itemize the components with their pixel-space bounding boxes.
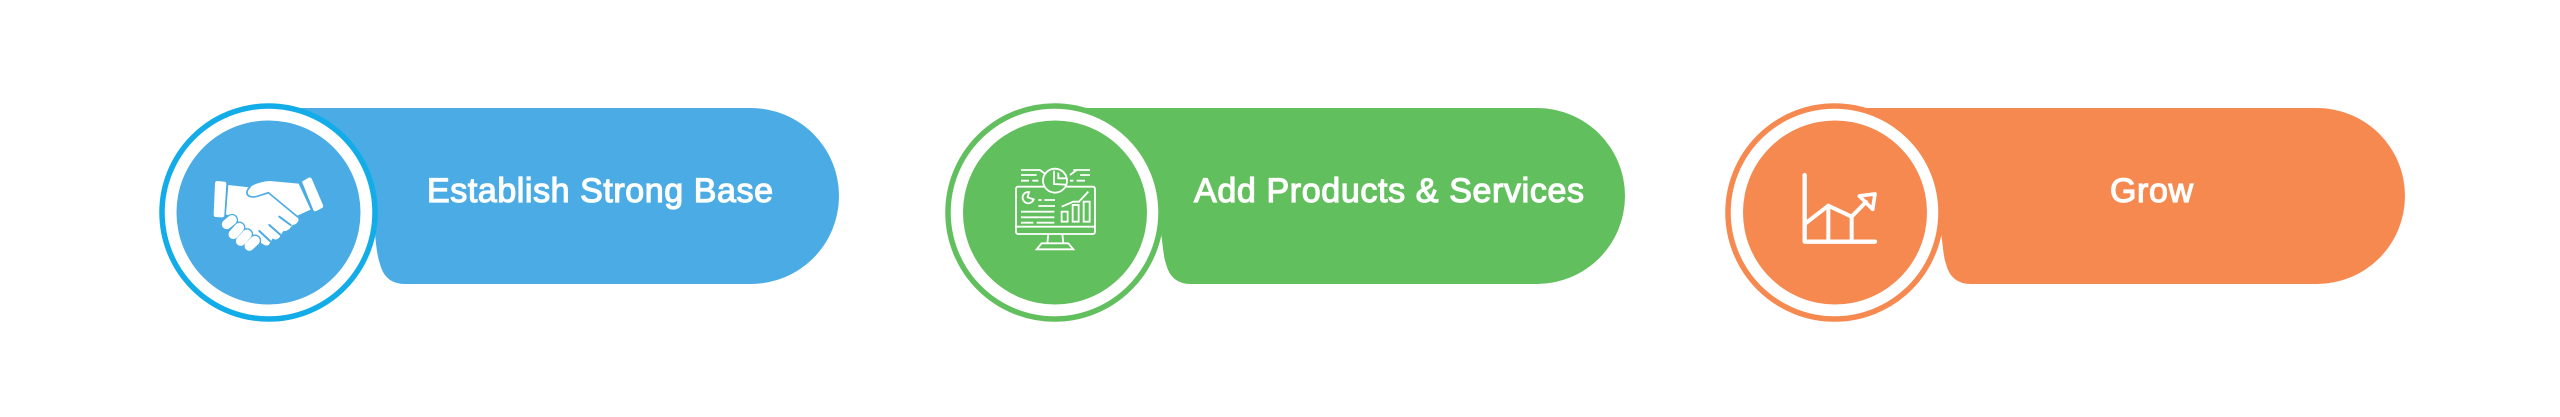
ring: orange xyxy=(1728,106,1941,319)
circle: orange xyxy=(1743,120,1927,304)
ring: blue xyxy=(162,106,375,319)
circle: green xyxy=(963,120,1147,304)
pill: orange xyxy=(1855,108,2405,284)
panel: add products and services xyxy=(948,106,1625,319)
heading: grow: Grow xyxy=(2110,172,2193,210)
icon: monitor dashboard xyxy=(1016,169,1095,249)
panel: grow xyxy=(1728,106,2405,319)
pill: blue xyxy=(290,108,839,284)
heading: establish strong base: Establish Strong Base xyxy=(427,172,773,210)
icon: handshake xyxy=(214,177,323,246)
ring: green xyxy=(948,106,1161,319)
icon: growth chart xyxy=(1805,175,1875,242)
heading: add products and services: Add Products & Services xyxy=(1194,172,1584,210)
panel: establish strong base xyxy=(162,106,839,319)
circle: blue xyxy=(176,120,360,304)
pill: green xyxy=(1075,108,1625,284)
